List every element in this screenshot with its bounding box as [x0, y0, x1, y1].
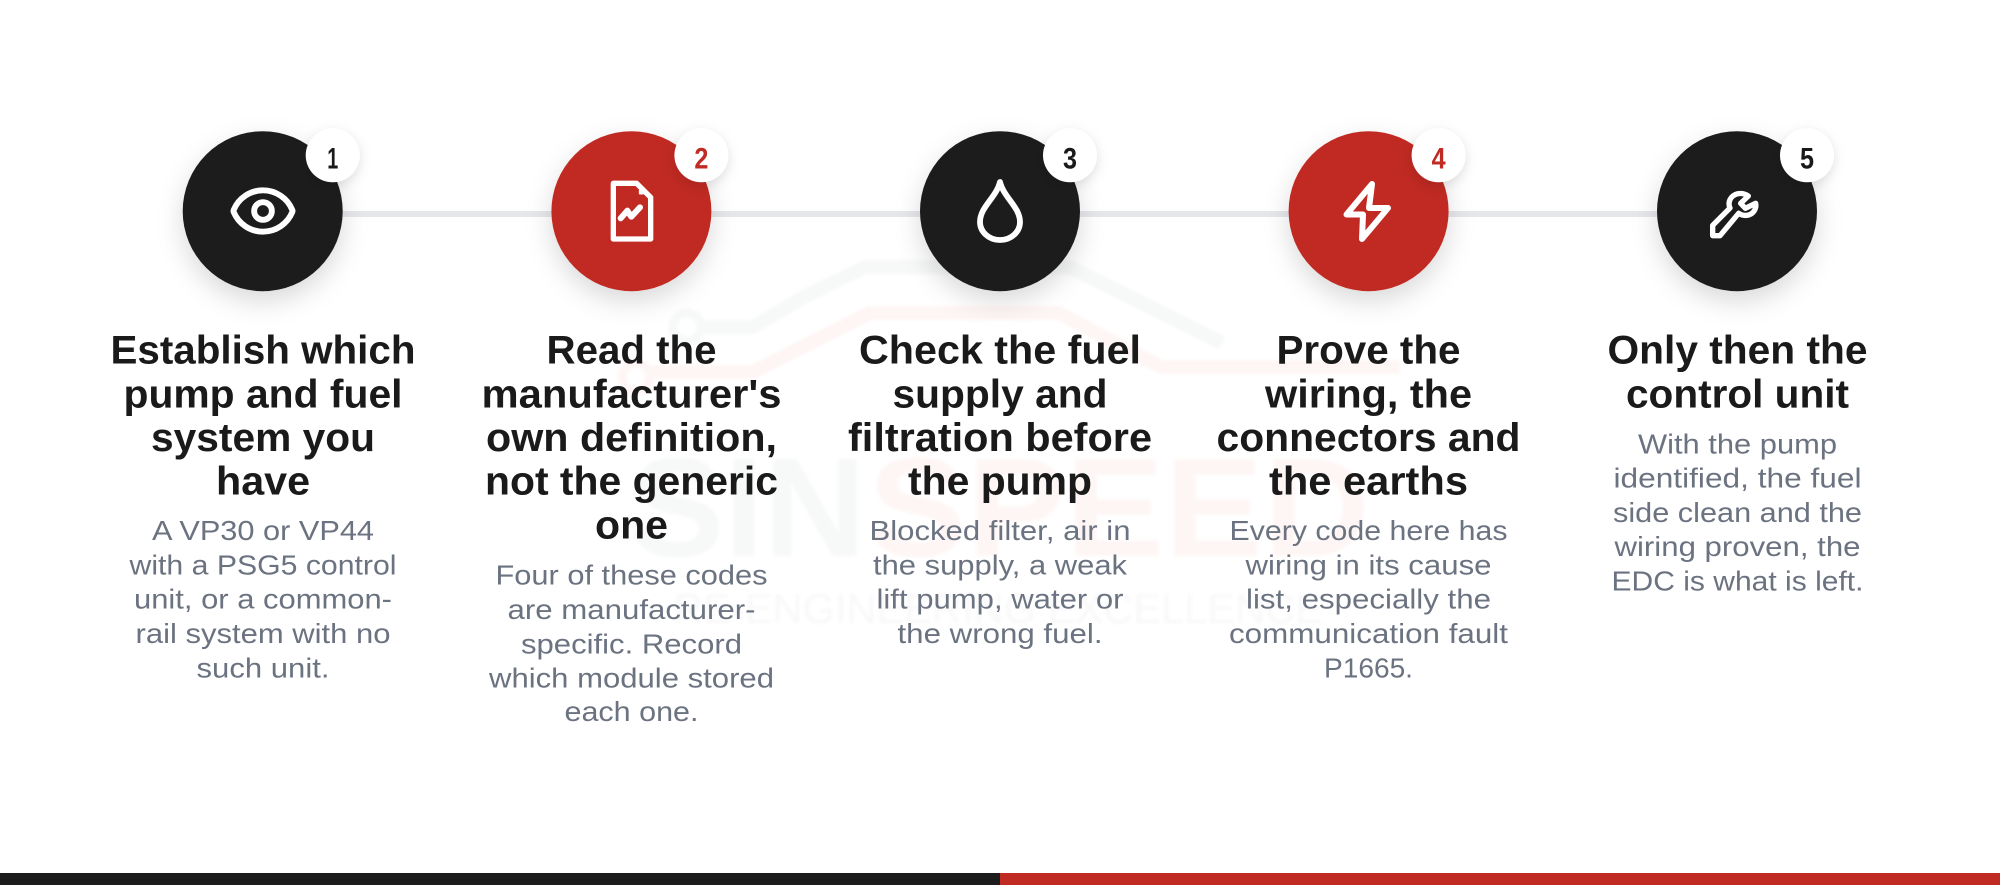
- step 5 heading: Only then the: [1608, 328, 1868, 372]
- step 3 heading: Check the fuel: [859, 328, 1141, 372]
- step 2 heading: Read the: [546, 328, 716, 372]
- watermark: SINSPEED logo: [622, 267, 1400, 632]
- step 2 description: are manufacturer-: [508, 594, 756, 625]
- step 5 description: EDC is what is left.: [1612, 565, 1864, 596]
- step 3 heading: [848, 328, 1152, 504]
- step 5: [1608, 128, 1868, 596]
- step 1 heading: pump and fuel: [124, 372, 402, 416]
- step 5 heading: [1608, 328, 1868, 416]
- step 1 heading: system you: [151, 416, 375, 460]
- step 3 heading: the pump: [908, 460, 1092, 504]
- watermark: SINSPEED logo: SIN: [630, 428, 866, 586]
- step 5 number badge: [1780, 128, 1834, 182]
- step 1 number badge: 1: [327, 143, 338, 176]
- step 4 heading: connectors and: [1216, 416, 1520, 460]
- icon: eye: [233, 190, 293, 232]
- icon: droplet: [980, 182, 1020, 240]
- step 3 description: the wrong fuel.: [898, 618, 1102, 649]
- step 5 description: identified, the fuel: [1614, 462, 1862, 494]
- step 3 circle: [920, 131, 1080, 291]
- step 2 heading: [482, 328, 782, 548]
- step 4: [1216, 128, 1520, 683]
- step 4 description: [1229, 515, 1508, 683]
- step 3 heading: supply and: [892, 372, 1108, 416]
- step 5 description: side clean and the: [1613, 497, 1862, 528]
- step 1 description: [128, 515, 397, 683]
- step 1 description: A VP30 or VP44: [152, 515, 374, 546]
- step 5 number badge: 5: [1800, 143, 1814, 176]
- icon: lightning bolt: [1346, 184, 1388, 239]
- step 2 number badge: [674, 128, 728, 182]
- step 5 heading: control unit: [1626, 372, 1849, 416]
- step 3 number badge: [1043, 128, 1097, 182]
- step 1 description: rail system with no: [136, 618, 390, 649]
- step 4 heading: [1216, 328, 1520, 504]
- step 1 description: unit, or a common-: [134, 584, 392, 615]
- step 5 description: With the pump: [1638, 428, 1837, 459]
- watermark: SINSPEED logo: RE-ENGINEERING EXCELLENCE: [673, 585, 1323, 632]
- step 1 heading: Establish which: [110, 328, 416, 372]
- step 4 description: communication fault: [1229, 618, 1508, 649]
- step 1 description: with a PSG5 control: [128, 549, 397, 580]
- step 3 number badge: 3: [1063, 143, 1077, 176]
- step 4 circle: [1289, 131, 1449, 291]
- icon: document with chart line: [613, 183, 651, 239]
- step 5 description: [1612, 428, 1864, 596]
- step 1 heading: [110, 328, 416, 504]
- step 3: [848, 128, 1152, 649]
- step 4 heading: wiring, the: [1264, 372, 1472, 416]
- step 2 description: Four of these codes: [496, 560, 768, 591]
- step 4 description: P1665.: [1324, 652, 1413, 683]
- watermark: SINSPEED logo: SPEED: [868, 428, 1370, 586]
- bottom bar: black and red: [0, 873, 2000, 885]
- step 2 description: specific. Record: [521, 628, 742, 659]
- step 2 description: each one.: [564, 696, 698, 727]
- step 3 description: [870, 515, 1130, 649]
- step 1 circle: [183, 131, 343, 291]
- step 4 heading: Prove the: [1276, 328, 1460, 372]
- step 2: [482, 128, 782, 727]
- step 2 heading: not the generic: [485, 460, 778, 504]
- step 1 number badge: [306, 128, 360, 182]
- step 4 description: list, especially the: [1246, 584, 1491, 615]
- step 1 description: such unit.: [196, 652, 330, 683]
- step 2 heading: one: [595, 504, 668, 548]
- connector line: [262, 211, 1737, 217]
- step 3 description: the supply, a weak: [873, 549, 1127, 580]
- step 4 heading: the earths: [1269, 460, 1468, 504]
- step 4 description: wiring in its cause: [1244, 549, 1492, 580]
- step 4 number badge: [1412, 128, 1466, 182]
- step 2 heading: own definition,: [486, 416, 777, 460]
- step 1: [110, 128, 416, 683]
- icon: wrench: [1713, 194, 1756, 236]
- step 3 heading: filtration before: [848, 416, 1152, 460]
- step 3 description: lift pump, water or: [876, 584, 1124, 615]
- step 5 circle: [1657, 131, 1817, 291]
- step 3 description: Blocked filter, air in: [870, 515, 1130, 546]
- step 5 description: wiring proven, the: [1613, 531, 1860, 562]
- step 2 heading: manufacturer's: [482, 372, 782, 416]
- step 2 description: which module stored: [488, 663, 774, 694]
- step 2 description: [488, 560, 774, 727]
- step 4 number badge: 4: [1432, 143, 1446, 176]
- step 4 description: Every code here has: [1230, 515, 1508, 546]
- step 2 number badge: 2: [694, 143, 708, 176]
- step 2 circle: [551, 131, 711, 291]
- step 1 heading: have: [216, 460, 310, 504]
